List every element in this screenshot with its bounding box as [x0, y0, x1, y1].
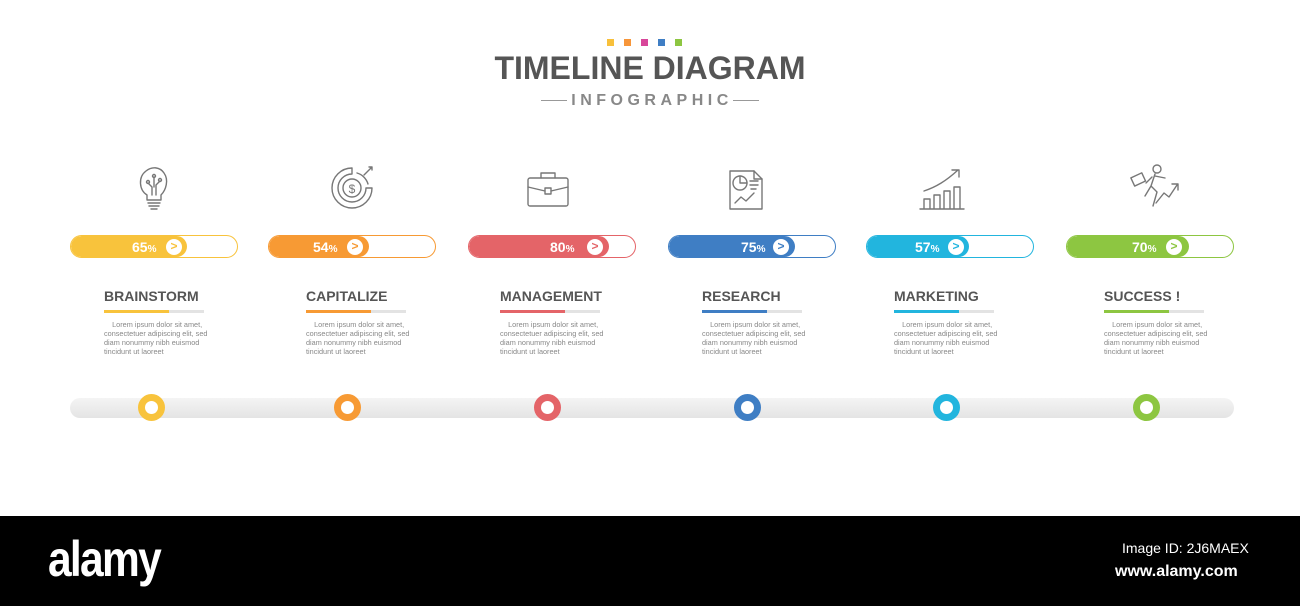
step 2: capitalize: consectetuer adipiscing elit, sed	[306, 329, 409, 338]
step 2: capitalize: tincidunt ut laoreet	[306, 347, 366, 356]
step 2: capitalize: Lorem ipsum dolor sit amet,	[314, 320, 404, 329]
step 3: management: Lorem ipsum dolor sit amet,	[508, 320, 598, 329]
step 3: management: MANAGEMENT	[500, 288, 602, 304]
step 2: capitalize: CAPITALIZE	[306, 288, 387, 304]
step 3: management: diam nonummy nibh euismod	[500, 338, 595, 347]
step 3: management	[468, 235, 636, 356]
step 6: success: Lorem ipsum dolor sit amet,	[1112, 320, 1202, 329]
icon: lightbulb	[140, 167, 168, 210]
icon: dollar target	[331, 166, 373, 209]
step 2: capitalize: 54%	[313, 239, 337, 255]
title block	[494, 39, 806, 109]
subtitle: INFOGRAPHIC	[571, 92, 733, 109]
icon: briefcase	[527, 172, 569, 207]
image id: Image ID: 2J6MAEX	[1122, 540, 1249, 556]
step 1: brainstorm: diam nonummy nibh euismod	[104, 338, 199, 347]
step 5: marketing: MARKETING	[894, 288, 979, 304]
step 5: marketing: diam nonummy nibh euismod	[894, 338, 989, 347]
heading: TIMELINE DIAGRAM	[494, 50, 806, 86]
step 6: success: consectetuer adipiscing elit, sed	[1104, 329, 1207, 338]
step 3: management: consectetuer adipiscing elit, sed	[500, 329, 603, 338]
step 4: research: diam nonummy nibh euismod	[702, 338, 797, 347]
step 1: brainstorm	[70, 235, 238, 356]
step 1: brainstorm: tincidunt ut laoreet	[104, 347, 164, 356]
color squares	[607, 39, 682, 46]
step 2: capitalize	[268, 235, 436, 356]
step 4: research: Lorem ipsum dolor sit amet,	[710, 320, 800, 329]
icon: report	[729, 170, 763, 210]
step 5: marketing: 57%	[915, 239, 939, 255]
step 5: marketing: Lorem ipsum dolor sit amet,	[902, 320, 992, 329]
icon: dollar target: $	[349, 182, 356, 196]
step 5: marketing: >	[952, 239, 960, 253]
step 1: brainstorm: BRAINSTORM	[104, 288, 199, 304]
logo: alamy	[48, 531, 160, 587]
timeline track	[70, 398, 1234, 418]
icon: growth chart	[919, 169, 965, 210]
step 6: success: 70%	[1132, 239, 1156, 255]
step 4: research: tincidunt ut laoreet	[702, 347, 762, 356]
step 3: management: tincidunt ut laoreet	[500, 347, 560, 356]
step 6: success: SUCCESS !	[1104, 288, 1180, 304]
step 5: marketing: tincidunt ut laoreet	[894, 347, 954, 356]
step 1: brainstorm: >	[170, 239, 178, 253]
step 4: research: >	[777, 239, 784, 253]
step 2: capitalize: >	[351, 239, 358, 253]
step 2: capitalize: diam nonummy nibh euismod	[306, 338, 401, 347]
timeline dots	[138, 394, 1160, 421]
step 3: management: >	[591, 239, 598, 253]
step 6: success: diam nonummy nibh euismod	[1104, 338, 1199, 347]
step 5: marketing: consectetuer adipiscing elit, sed	[894, 329, 997, 338]
step 6: success: >	[1170, 239, 1178, 253]
step 4: research: 75%	[741, 239, 765, 255]
step 4: research: consectetuer adipiscing elit, sed	[702, 329, 805, 338]
step 6: success	[1066, 235, 1234, 356]
icon: climbing man	[1130, 164, 1179, 207]
footer band	[0, 516, 1300, 606]
step 1: brainstorm: Lorem ipsum dolor sit amet,	[112, 320, 202, 329]
step 4: research	[668, 235, 836, 356]
url: www.alamy.com	[1115, 563, 1238, 580]
step 4: research: RESEARCH	[702, 288, 781, 304]
step 1: brainstorm: consectetuer adipiscing elit, sed	[104, 329, 207, 338]
step 3: management: 80%	[550, 239, 574, 255]
step 1: brainstorm: 65%	[132, 239, 156, 255]
step 5: marketing	[866, 235, 1034, 356]
step 6: success: tincidunt ut laoreet	[1104, 347, 1164, 356]
